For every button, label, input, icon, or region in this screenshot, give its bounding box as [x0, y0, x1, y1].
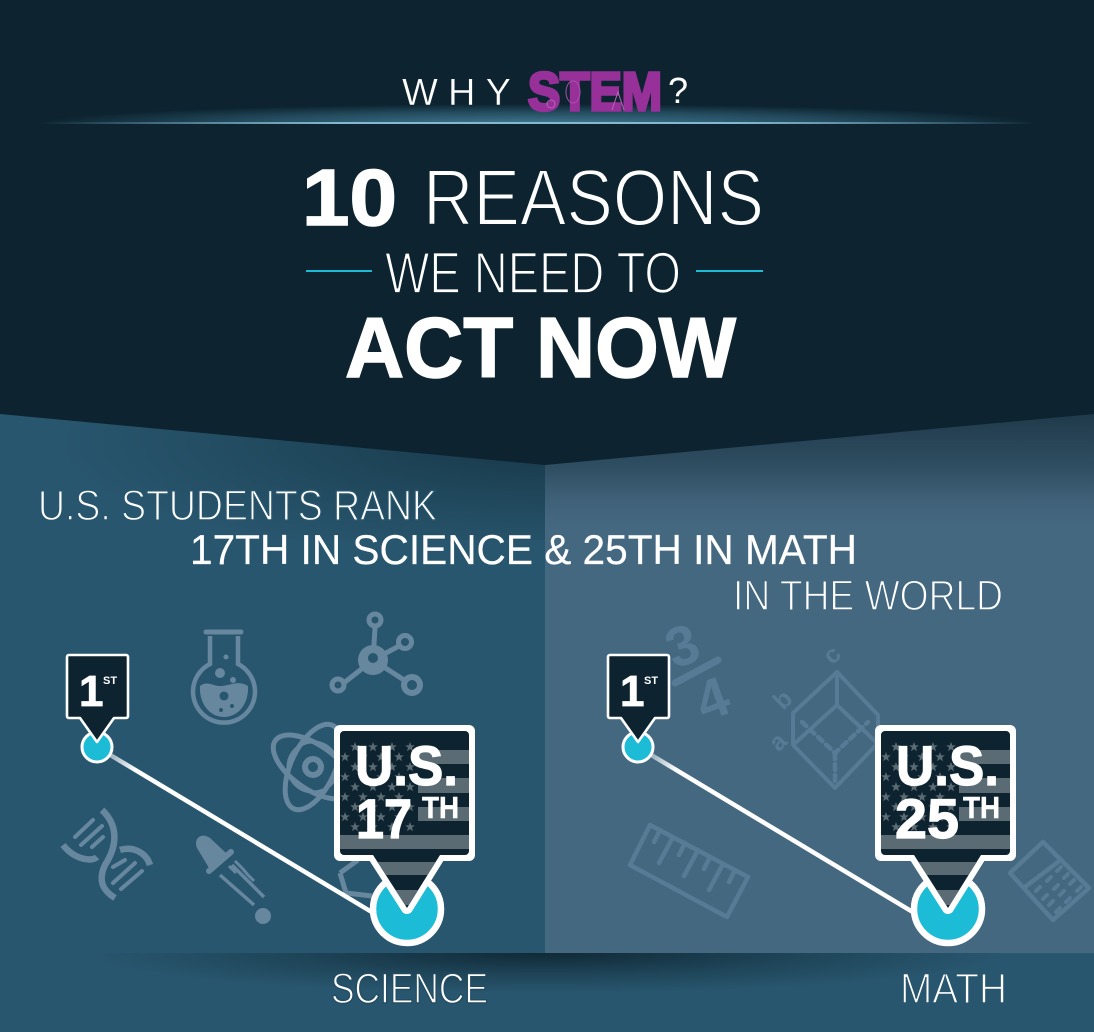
text: 17th in science and 25th in math: 17TH IN SCIENCE & 25TH IN MATH	[190, 526, 857, 573]
title: 10 reasons: REASONS	[423, 153, 764, 242]
icon: fraction three quarters	[657, 611, 738, 733]
marker: math u.s. 25th: U.S.	[896, 734, 999, 797]
marker: math u.s. 25th	[876, 725, 1016, 943]
label: science: SCIENCE	[331, 965, 488, 1013]
icon: cube: c	[817, 640, 847, 670]
title: 10 reasons	[302, 153, 764, 242]
icon: fraction three quarters: 4	[687, 664, 738, 733]
icon: dropper	[196, 836, 271, 924]
panel: math background	[545, 410, 1094, 953]
icon: atom	[263, 716, 363, 818]
heading: why stem: WHY	[402, 72, 511, 114]
title: 10 reasons: 10	[302, 153, 397, 242]
icon: flask	[193, 632, 255, 723]
stem logo: STEM	[528, 62, 662, 122]
heading: why stem: ?	[668, 70, 688, 111]
marker: math first: ST	[644, 675, 658, 687]
header glow divider	[50, 106, 1025, 124]
icon: fraction three quarters: 3	[657, 611, 708, 680]
panel shadow: math side	[545, 410, 1094, 525]
marker: math u.s. 25th: 25	[895, 787, 959, 850]
title: act now: ACT NOW	[345, 301, 737, 396]
header background	[0, 0, 1094, 465]
marker: science u.s. 17th: TH	[422, 790, 459, 825]
icon: cube: a	[763, 726, 794, 757]
icon: cube: b	[768, 685, 798, 715]
marker: science u.s. 17th: U.S.	[355, 734, 458, 797]
icon: dna	[63, 810, 150, 898]
marker: math u.s. 25th: TH	[963, 790, 1000, 825]
marker: science first	[67, 655, 128, 762]
heading: why stem	[402, 62, 688, 122]
marker: math first: 1	[620, 667, 644, 716]
text: u.s. students rank: U.S. STUDENTS RANK	[38, 482, 437, 530]
panel: bottom label band shadow	[90, 953, 1000, 1032]
icon: cube	[763, 640, 878, 788]
connector line: math	[638, 747, 916, 914]
text: in the world: IN THE WORLD	[733, 572, 1003, 620]
icon: hexagon ring	[340, 860, 372, 896]
marker: science u.s. 17th: 17	[356, 787, 412, 850]
title: we need to: WE NEED TO	[385, 241, 681, 306]
marker: science first: 1	[79, 667, 103, 716]
panel shadow: science side	[0, 410, 545, 540]
marker: science first: ST	[103, 675, 117, 687]
marker: math first	[608, 655, 669, 762]
icon: calculator	[1010, 842, 1089, 920]
icon: ruler	[630, 825, 748, 917]
marker: science u.s. 17th	[335, 725, 475, 943]
connector line: science	[97, 747, 375, 914]
label: math: MATH	[900, 965, 1007, 1013]
icon: molecule	[332, 614, 420, 693]
